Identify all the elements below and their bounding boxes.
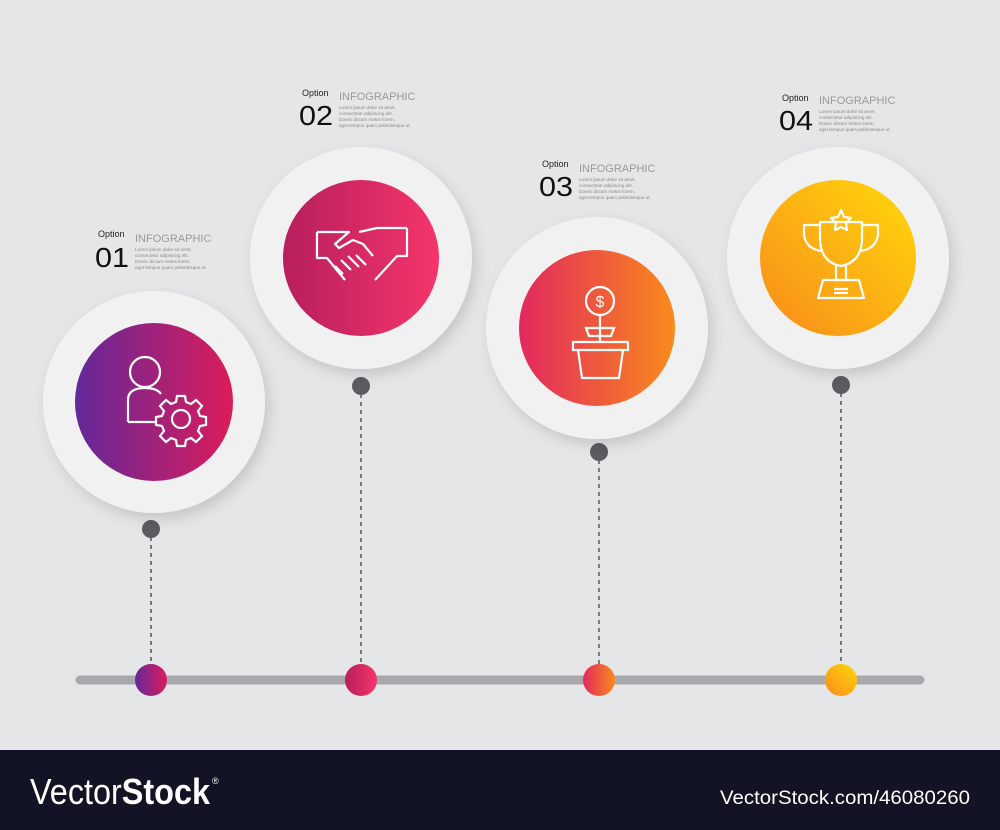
text block 04: Lorem ipsum dolor sit amet, — [819, 109, 876, 114]
text block 01: 01 — [95, 242, 129, 273]
text block 04: consectetur adipiscing elit. — [819, 115, 873, 120]
panel 4 — [727, 147, 949, 369]
connector 2 — [352, 377, 370, 668]
text block 03: Option — [542, 159, 569, 169]
text block 02: eget tempus quam pellentesque ut. — [339, 123, 411, 128]
footer bar: ® — [212, 776, 219, 786]
text block 01: eget tempus quam pellentesque ut. — [135, 265, 207, 270]
text block 04 — [779, 93, 895, 136]
text block 03: consectetur adipiscing elit. — [579, 183, 633, 188]
panel 2 — [250, 147, 472, 369]
text block 04: 04 — [779, 105, 813, 136]
text block 03: eget tempus quam pellentesque ut. — [579, 195, 651, 200]
text block 03: Lorem ipsum dolor sit amet, — [579, 177, 636, 182]
timeline dots — [135, 664, 857, 696]
connector 1 — [142, 520, 160, 668]
footer bar — [0, 750, 1000, 830]
text block 02: INFOGRAPHIC — [339, 91, 415, 103]
text block 04: eget tempus quam pellentesque ut. — [819, 127, 891, 132]
footer bar: VectorStock — [30, 771, 211, 812]
text block 03: INFOGRAPHIC — [579, 163, 655, 175]
text block 01 — [95, 229, 211, 273]
text block 01: Option — [98, 229, 125, 239]
connector 4 — [832, 376, 850, 668]
text block 03 — [539, 159, 655, 202]
text block 04: INFOGRAPHIC — [819, 95, 895, 107]
text block 02: 02 — [299, 100, 333, 131]
connector 3 — [590, 443, 608, 668]
text block 02: Lorem ipsum dolor sit amet, — [339, 105, 396, 110]
text block 02: Option — [302, 88, 329, 98]
text block 03: Donec dictum metus lorem, — [579, 189, 635, 194]
text block 02: Donec dictum metus lorem, — [339, 117, 395, 122]
panel 1 — [43, 291, 265, 513]
icon: trophy — [804, 210, 878, 298]
text block 02 — [299, 88, 415, 131]
text block 01: INFOGRAPHIC — [135, 233, 211, 245]
text block 01: Lorem ipsum dolor sit amet, — [135, 247, 192, 252]
icon: money plant — [573, 287, 628, 378]
panel 3 — [486, 217, 708, 439]
text block 03: 03 — [539, 171, 573, 202]
text block 04: Donec dictum metus lorem, — [819, 121, 875, 126]
text block 01: consectetur adipiscing elit. — [135, 253, 189, 258]
text block 02: consectetur adipiscing elit. — [339, 111, 393, 116]
timeline bar — [80, 676, 920, 684]
icon: money plant: $ — [596, 294, 605, 311]
icon: person with gear — [128, 357, 206, 446]
icon: handshake — [317, 228, 407, 280]
footer bar: VectorStock.com/46080260 — [720, 788, 970, 809]
text block 04: Option — [782, 93, 809, 103]
text block 01: Donec dictum metus lorem, — [135, 259, 191, 264]
